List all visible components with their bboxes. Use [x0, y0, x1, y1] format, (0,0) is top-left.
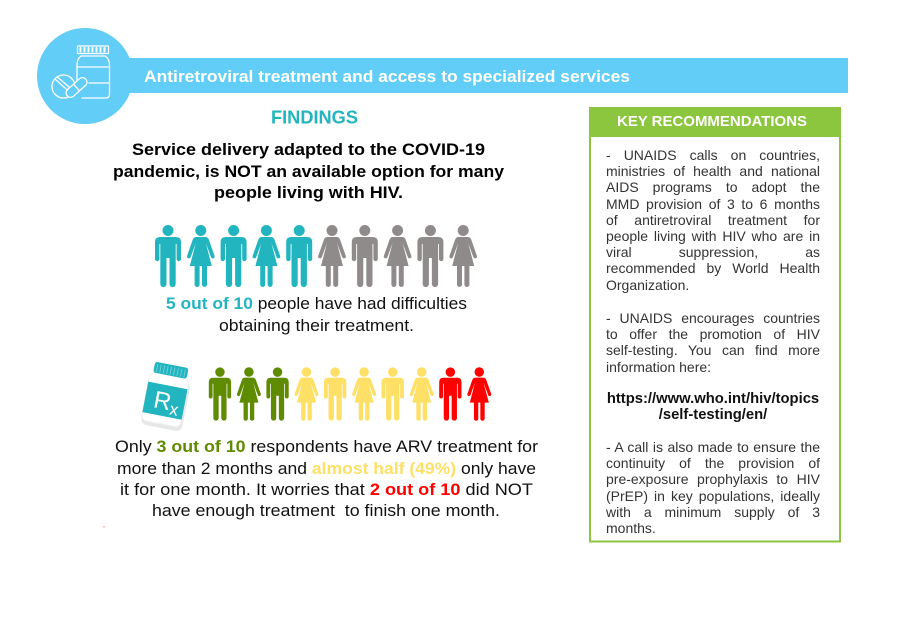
panel header	[589, 107, 841, 137]
icon: Rx bottle: x	[168, 399, 181, 420]
text block: recommendation 3	[606, 439, 820, 536]
caption: ARV treatment: Only 3 out of 10 respondents have ARV treatment for	[115, 437, 538, 456]
text block: recommendation 1: viral suppression, as	[606, 244, 820, 260]
caption: 5 out of 10: obtaining their treatment.	[219, 316, 414, 335]
text block: recommendation 1: recommended by World Health	[606, 260, 820, 276]
panel heading: KEY RECOMMENDATIONS	[617, 113, 807, 130]
statement text	[113, 140, 505, 202]
text block: recommendation 3: with a minimum supply of 3	[606, 504, 820, 520]
link: self-testing URL: /self-testing/en/	[659, 407, 767, 423]
heading: findings: FINDINGS	[271, 108, 358, 128]
header circle	[37, 28, 133, 124]
caption: ARV treatment: it for one month. It worries that 2 out of 10 did NOT	[120, 480, 533, 499]
icon: medicine bottle and pills	[52, 46, 110, 99]
text block: recommendation 2: to offer the promotion of HIV	[606, 326, 820, 342]
panel frame	[590, 108, 840, 542]
statement text: pandemic, is NOT an available option for many	[113, 162, 505, 181]
icon: Rx bottle	[140, 361, 194, 432]
text block: recommendation 3: months.	[606, 520, 656, 536]
text block: recommendation 3: - A call is also made to ensure the	[606, 439, 820, 455]
caption: ARV treatment	[115, 437, 538, 520]
caption: ARV treatment: have enough treatment to finish one month.	[152, 501, 500, 520]
text block: recommendation 3: pre-exposure prophylaxis to HIV	[606, 471, 820, 487]
text block: recommendation 2	[606, 310, 820, 375]
text block: recommendation 1: Organization.	[606, 277, 689, 293]
text block: recommendation 3: continuity of the provision of	[606, 455, 820, 471]
text block: recommendation 3: (PrEP) in key populations, ideally	[606, 488, 820, 504]
header title: Antiretroviral treatment and access to specialized services	[144, 68, 630, 86]
tiny mark	[103, 526, 105, 528]
pictogram: 5 out of 10 people	[155, 225, 477, 287]
text block: recommendation 1: people living with HIV who are in	[606, 228, 820, 244]
statement text: Service delivery adapted to the COVID-19	[132, 140, 485, 159]
text block: recommendation 2: information here:	[606, 359, 711, 375]
text block: recommendation 1: - UNAIDS calls on countries,	[606, 147, 820, 163]
text block: recommendation 1: AIDS programs to adopt the	[606, 179, 820, 195]
statement text: people living with HIV.	[214, 183, 403, 202]
pictogram: ARV treatment coverage	[209, 367, 491, 421]
caption: 5 out of 10: 5 out of 10 people have had difficulties	[166, 294, 467, 313]
link: self-testing URL	[607, 391, 819, 423]
panel: key recommendations	[589, 107, 841, 542]
text block: recommendation 2: - UNAIDS encourages countries	[606, 310, 820, 326]
text block: recommendation 1: MMD provision of 3 to 6 months	[606, 196, 820, 212]
caption: 5 out of 10	[166, 294, 467, 335]
header banner	[37, 28, 848, 124]
text block: recommendation 1: of antiretroviral treatment for	[606, 212, 820, 228]
caption: ARV treatment: more than 2 months and almost half (49%) only have	[117, 459, 536, 478]
text block: recommendation 2: self-testing. You can find more	[606, 342, 820, 358]
header bar	[120, 58, 848, 93]
link: self-testing URL: https://www.who.int/hiv/topics	[607, 391, 819, 407]
text block: recommendation 1: ministries of health and national	[606, 163, 820, 179]
icon: Rx bottle: R	[151, 386, 174, 416]
text block: recommendation 1	[606, 147, 820, 293]
